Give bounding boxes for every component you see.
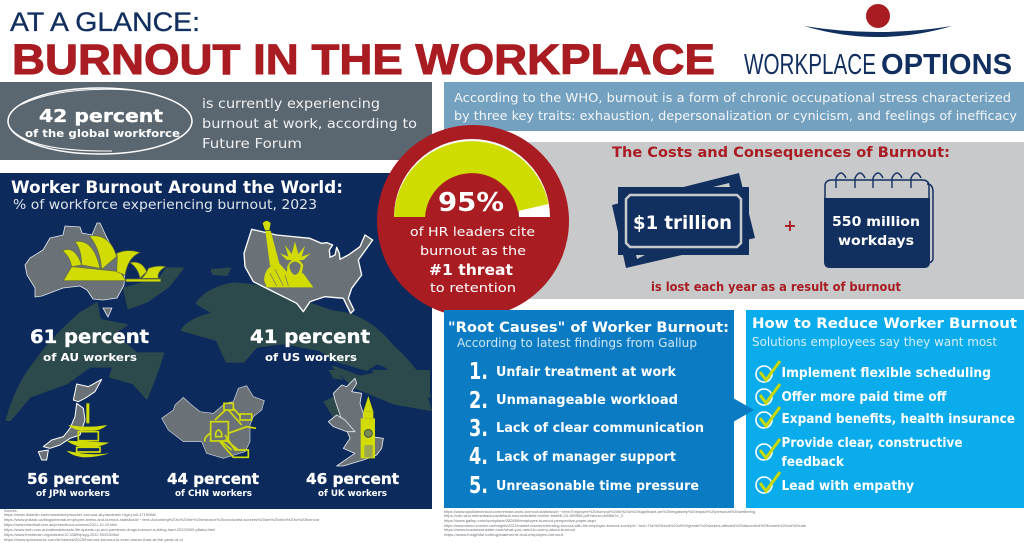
- numbers: [469, 359, 488, 499]
- stat: 42 percent: 42 percent: [39, 107, 163, 127]
- causes list: Lack of clear communication: [496, 421, 704, 436]
- text block: sources left: https://www.pollack.ca/blogs/mental-employee-stress-and-burnout-statistics/#:~:text=According%20to%20the%20research%20conducted,workers%20are%20cited%20to%20burnout: [4, 518, 319, 522]
- text block: sources right: https://cdn.who.int/media/docs/default-source/bulletin/online-first/blt.23.289996.pdf?sfvrsn=b8f6d7e_3: [444, 514, 623, 518]
- text block: sources right: https://www.businessinsider.com/what-you-need-to-worry-about-burnout: [444, 528, 575, 532]
- panel: WHO definition: According to the WHO, burnout is a form of chronic occupational stress characterized: [454, 90, 1011, 105]
- icon: calendar: [824, 173, 933, 268]
- stat description: is currently experiencing: [202, 97, 380, 112]
- gauge text: [410, 224, 535, 295]
- hand-drawn ellipse: [8, 88, 192, 154]
- text block: sources left: https://www.smh.com.au/national/aussie-life-speeds-up-and-pandemic-drags-burnout-is-biting-hard-20220000-p5aba.html: [4, 528, 215, 532]
- text block: sources right: https://www.gallup.com/workplace/282659/employee-burnout-perspective-paper.aspx: [444, 519, 596, 523]
- stat: 41 percent: 41 percent: [250, 327, 370, 348]
- label: CHN workers: of CHN workers: [175, 489, 252, 499]
- panel: worker burnout around the world: [0, 173, 432, 509]
- gauge text: #1 threat: [429, 261, 513, 279]
- title: burnout in the workplace: BURNOUT IN THE WORKPLACE: [12, 36, 715, 84]
- gauge arc: [394, 139, 550, 217]
- map: China with great wall: [162, 386, 264, 458]
- panel: WHO definition: [444, 82, 1024, 131]
- icon: dollar bills: $1 trillion: [633, 212, 732, 234]
- solutions list: Lead with empathy: [782, 479, 914, 494]
- panel: costs and consequences: [440, 142, 1024, 299]
- callout: 95 percent gauge circle: [377, 125, 569, 317]
- causes list: Unmanageable workload: [496, 393, 678, 408]
- numbers: 5.: [469, 473, 488, 499]
- solutions list: Offer more paid time off: [782, 390, 947, 405]
- stat: 46 percent: 46 percent: [306, 470, 399, 488]
- map: United Kingdom with big ben: [323, 370, 430, 466]
- text block: sources right: https://www.insightful.io/blog/statement-real-employee-burnout: [444, 533, 563, 537]
- gauge text: of HR leaders cite: [410, 224, 535, 239]
- background globe landmasses: [7, 268, 431, 420]
- icon: dollar bills: [612, 173, 755, 268]
- numbers: 3.: [469, 416, 488, 442]
- text block: sources left: https://www.linkedin.com/news/story/worker-burnout-at-pandemic-high-poll-4715086/: [4, 513, 156, 517]
- gauge text: burnout as the: [420, 243, 526, 258]
- causes list: Lack of manager support: [496, 450, 676, 465]
- gauge text: to retention: [430, 280, 516, 295]
- solutions list: Provide clear, constructive: [782, 436, 963, 451]
- map: Australia with opera house: [25, 223, 166, 317]
- solutions list: [782, 366, 1015, 494]
- logo: workplace options: WORKPLACE: [744, 49, 876, 81]
- text block: sources right: https://www.apollotechnical.com/remote-work-burnout-statistics/#:~:text=Employee%20burnout%20is%20a%20significant,an%20negatively%20impact%20personal%20wellbeing: [444, 510, 755, 514]
- stat description: [202, 97, 417, 152]
- solutions list: feedback: [782, 455, 844, 470]
- stat description: burnout at work, according to: [202, 117, 417, 132]
- costs heading: The Costs and Consequences of Burnout:: [612, 145, 950, 161]
- panel: how to reduce burnout: [746, 310, 1024, 508]
- plus sign: +: [783, 216, 797, 235]
- heading: world: Worker Burnout Around the World:: [11, 178, 343, 198]
- solutions list: Implement flexible scheduling: [782, 366, 991, 381]
- subheading: root causes: According to latest findings from Gallup: [457, 336, 697, 350]
- panel: root causes: [444, 310, 754, 508]
- heading: root causes: "Root Causes" of Worker Burnout:: [448, 320, 729, 336]
- stat: 61 percent: 61 percent: [30, 327, 149, 348]
- heading: reduce: How to Reduce Worker Burnout: [752, 316, 1017, 332]
- map: Japan with pagoda: [38, 379, 109, 460]
- text block: sources right: https://www.wtwco.com/en-us/insights/2022/market-research/trending-burnout-with-the-employee-burnout-survey/#:~:text=The%20trend%20of%20greater%20workers,affected%20discomfort%20burned%20out%20rate: [444, 524, 806, 528]
- stat: 44 percent: 44 percent: [167, 470, 259, 488]
- causes list: [496, 365, 704, 494]
- causes list: Unfair treatment at work: [496, 365, 676, 380]
- stat label: of the global workforce: [25, 128, 180, 140]
- icons: check marks: [756, 361, 780, 493]
- icon: calendar: 550 million: [832, 215, 920, 230]
- logo: workplace options: [744, 4, 1012, 81]
- costs caption: is lost each year as a result of burnout: [651, 279, 901, 294]
- map: United States with liberty: [244, 221, 373, 313]
- causes list: Unreasonable time pressure: [496, 479, 699, 494]
- numbers: 1.: [469, 359, 488, 385]
- panel: WHO definition: by three key traits: exhaustion, depersonalization or cynicism, and feelings of inefficacy: [454, 108, 1018, 123]
- numbers: 2.: [469, 388, 488, 414]
- heading: at a glance: AT A GLANCE:: [10, 7, 200, 37]
- stat description: Future Forum: [202, 137, 302, 152]
- label: AU workers: of AU workers: [43, 352, 137, 364]
- text block: sources right: [444, 510, 806, 537]
- subheading: reduce: Solutions employees say they want most: [752, 335, 997, 349]
- label: UK workers: of UK workers: [318, 489, 387, 499]
- logo: workplace options: OPTIONS: [881, 49, 1012, 81]
- text block: sources left: Sources:: [4, 509, 17, 513]
- text block: sources left: [4, 509, 319, 542]
- label: JPN workers: of JPN workers: [36, 489, 110, 499]
- panel: 42 percent stat: [0, 82, 432, 160]
- arrow: root causes to solutions: [733, 398, 754, 422]
- text block: sources left: https://www.roberthalf.com.au/press/about-us/news/2021-10-20.html: [4, 523, 117, 527]
- numbers: 4.: [469, 444, 488, 470]
- subheading: world: % of workforce experiencing burnout, 2023: [13, 198, 317, 213]
- text block: sources left: https://www.spiceworks.com/hr/stories/2023/burnout-burnout-is-even-worse-than-at-the-peak-of-c/: [4, 538, 183, 542]
- stat: 56 percent: 56 percent: [27, 470, 119, 488]
- label: US workers: of US workers: [265, 352, 357, 364]
- stat: 95%: 95%: [438, 188, 504, 218]
- icon: calendar: workdays: [838, 234, 914, 249]
- text block: sources left: https://www.frontiersin.org/articles/10.3389/fpsyg.2022.934330/full: [4, 533, 119, 537]
